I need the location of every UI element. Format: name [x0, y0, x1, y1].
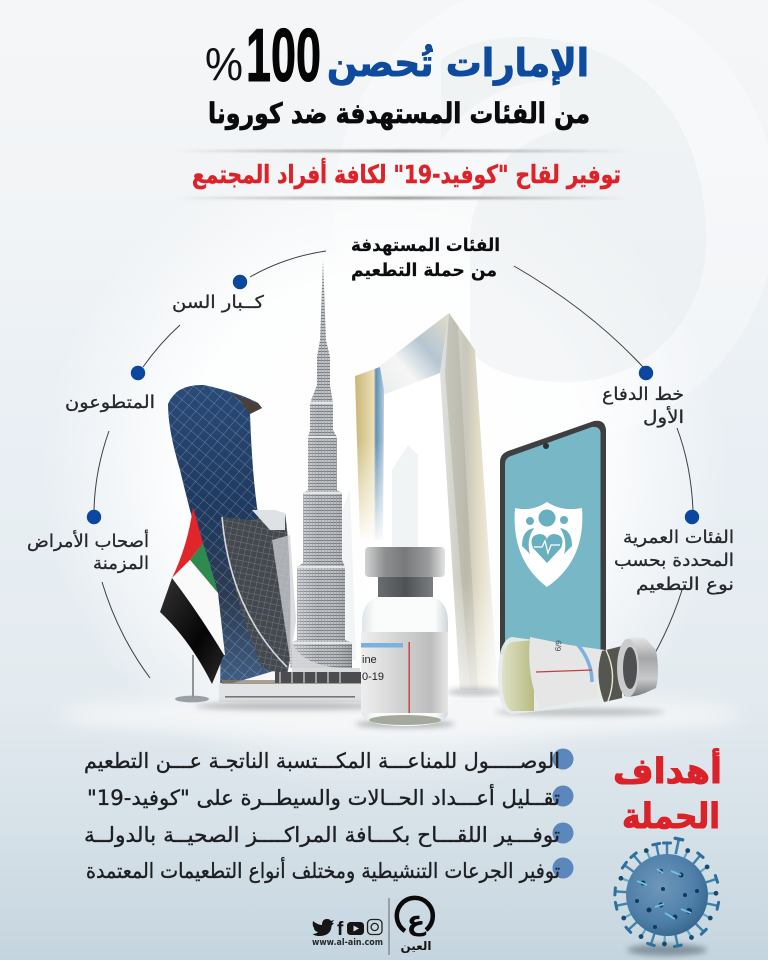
Capital Gate tower — [168, 385, 360, 687]
phone body — [500, 421, 606, 655]
standing vaccine vial — [355, 547, 455, 728]
Dubai Frame — [338, 313, 505, 700]
logo wordmark: العين — [400, 939, 432, 953]
red tagline: توفير لقاح "كوفيد-19" لكافة أفراد المجتمع — [192, 158, 621, 190]
ground shadow city — [195, 688, 503, 710]
flag red — [172, 507, 203, 578]
label: age groups — [614, 528, 734, 595]
phone screen — [505, 427, 600, 655]
label: chronic patients — [27, 529, 149, 574]
icon: youtube — [347, 922, 364, 935]
flag pole — [175, 655, 209, 702]
vial neck — [378, 576, 433, 597]
goal 1: الوصـــــول للمناعـــة المكـــتسبة الناتجـة عـــن التطعيم — [84, 749, 560, 774]
vial glass body — [498, 637, 612, 714]
label text: ine — [362, 654, 377, 666]
goal 4: توفير الجرعات التنشيطية ومختلف أنواع التطعيمات المعتمدة — [86, 857, 560, 883]
flag white — [172, 560, 225, 655]
label text — [362, 654, 384, 683]
heading 100 percent: 100 — [246, 13, 321, 97]
logo emblem: ع — [407, 906, 427, 937]
percent sign: % — [205, 38, 243, 90]
dot: volunteers — [131, 366, 145, 380]
circle heading: الفئات المستهدفة — [351, 235, 500, 256]
dot: chronic patients — [87, 510, 101, 524]
divider bottom — [175, 197, 630, 199]
label: age groups: نوع التطعيم — [636, 575, 734, 595]
goal bullets — [552, 748, 574, 878]
camera — [543, 443, 549, 449]
connector arcs — [94, 251, 693, 678]
lying cap — [624, 637, 658, 697]
subtitle: من الفئات المستهدفة ضد كورونا — [208, 97, 590, 130]
label: chronic patients: المزمنة — [93, 554, 149, 574]
heading blue text: الإمارات تُحصن — [327, 41, 589, 85]
Burj Khalifa tower — [290, 260, 352, 668]
goals heading: الحملة — [622, 797, 720, 837]
flag green — [190, 543, 218, 593]
lying vaccine vial — [495, 637, 665, 716]
vial glass — [362, 597, 448, 726]
UAE flag — [160, 507, 225, 702]
label: front line — [602, 385, 684, 428]
lying neck — [598, 646, 622, 702]
goal 3: توفـــير اللقـــاح بكـــافة المراكــــز الصحيــة بالدولــة — [84, 823, 560, 847]
divider top — [175, 150, 630, 152]
phone — [500, 421, 606, 655]
label: older adults: كــبار السن — [172, 293, 265, 313]
icon: facebook: f — [337, 919, 344, 940]
vial label — [361, 632, 448, 713]
dot: age groups — [685, 510, 699, 524]
circle heading: من حملة التطعيم — [351, 260, 497, 281]
vial cap — [365, 547, 445, 577]
shield icon — [515, 502, 582, 587]
dot: front line — [639, 366, 653, 380]
lying vaccine vial: 6/9 — [553, 640, 563, 652]
flag black — [160, 578, 224, 684]
icon: twitter — [312, 919, 334, 936]
liquid — [502, 640, 534, 711]
goals heading: أهداف — [613, 748, 722, 792]
label: age groups: المحددة بحسب — [614, 551, 734, 571]
circle heading — [351, 235, 500, 281]
city skyline — [168, 260, 505, 710]
label: volunteers: المتطوعون — [65, 393, 155, 413]
label blue strip — [361, 643, 403, 648]
label: age groups: الفئات العمرية — [623, 528, 734, 548]
label: chronic patients: أصحاب الأمراض — [27, 529, 149, 552]
logo divider — [388, 898, 390, 955]
label: front line: الأول — [643, 406, 684, 428]
goal 2: تقــليل أعـــداد الحــالات والسيطــرة على "كوفيد-19" — [87, 784, 560, 810]
lying label — [529, 637, 603, 708]
icon: instagram — [368, 920, 382, 934]
title: main heading — [205, 13, 589, 97]
label: front line: خط الدفاع — [602, 385, 684, 405]
goals heading — [613, 748, 722, 837]
label text: 0-19 — [362, 671, 384, 683]
label red line — [408, 642, 410, 713]
goals list — [84, 748, 574, 883]
website: www.al-ain.com — [312, 938, 383, 948]
podium base — [219, 672, 364, 702]
dot: older adults — [233, 275, 247, 289]
virus illustration — [615, 838, 719, 956]
brand logo block — [312, 898, 433, 955]
